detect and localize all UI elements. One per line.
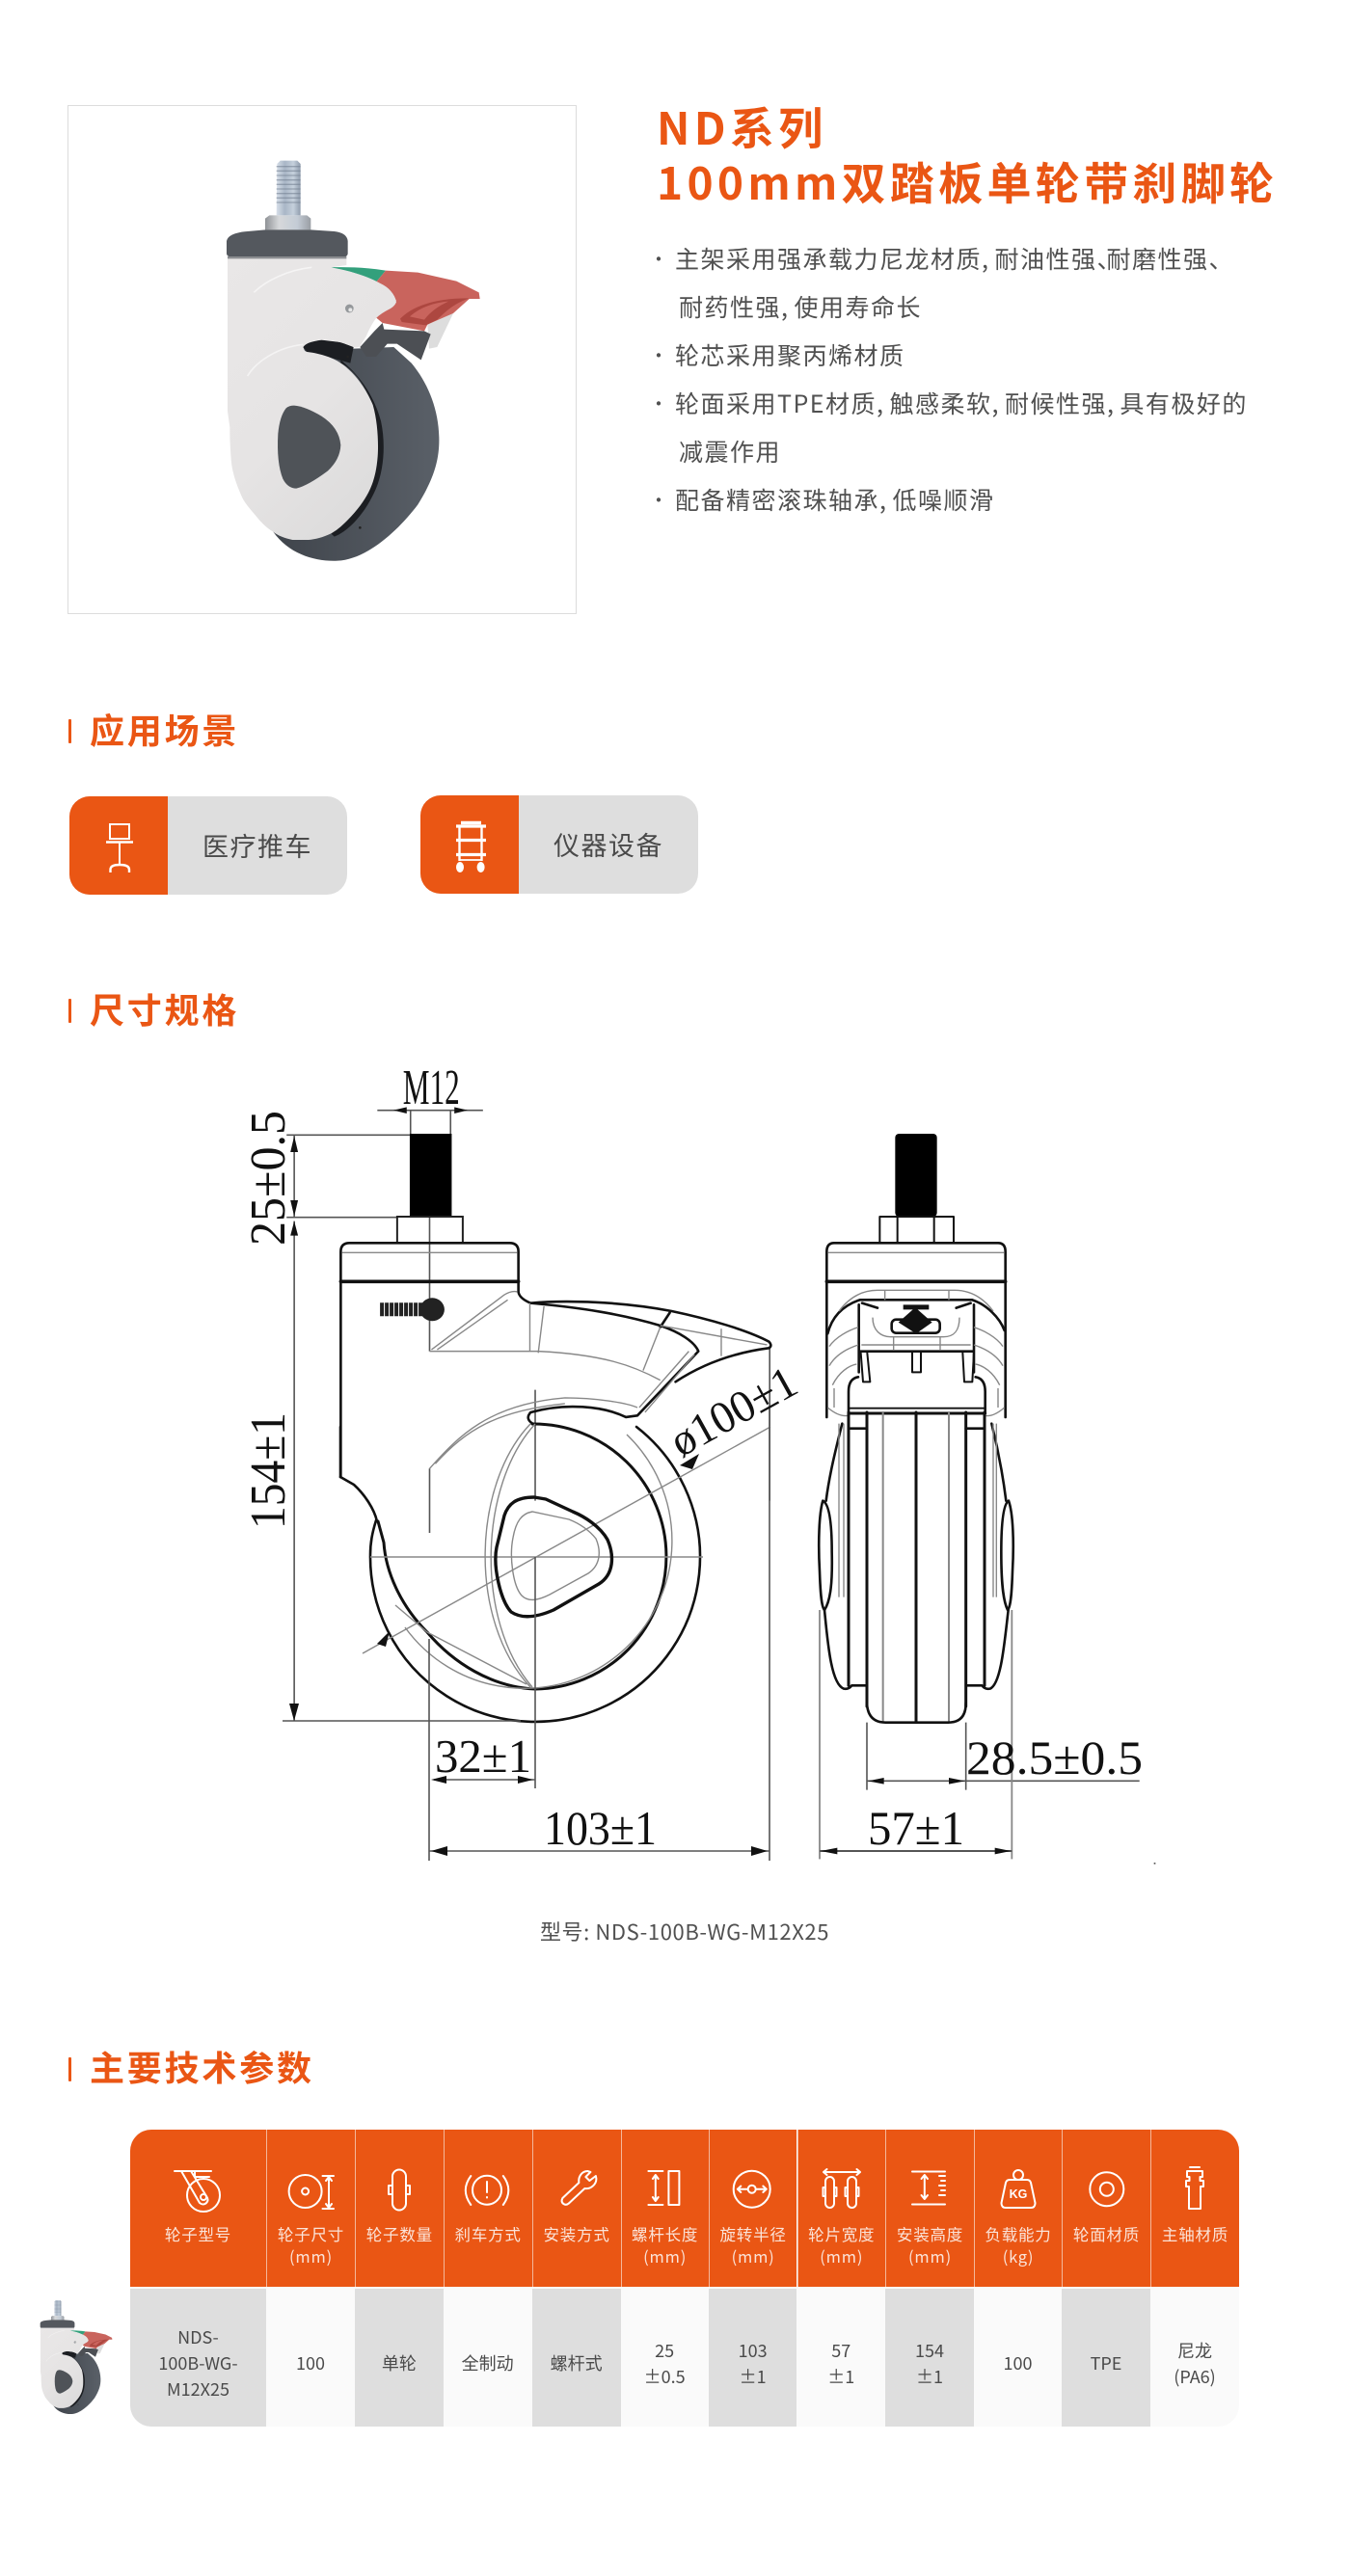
column: brake type [444,2130,532,2287]
column: wheel width: 轮片宽度 [808,2222,875,2245]
column: tread material [1062,2130,1150,2287]
column: mounting type [532,2130,621,2287]
cell: mounting height [885,2289,974,2427]
icon: caster thumbnail [40,2300,112,2414]
text block: product features: 轮芯采用聚丙烯材质 [675,337,905,372]
text block: product features: 减震作用 [679,434,781,469]
text block: product features: 主架采用强承载力尼龙材质,耐油性强、耐磨性强、 [675,241,1219,276]
cell: shaft: 尼龙 [1177,2337,1212,2362]
text block: product features: · [649,244,669,272]
text block: product features: · [649,389,669,416]
column: shaft material: 主轴材质 [1162,2222,1228,2245]
side view with dimensions: 154±1 [241,1412,296,1529]
icon: instrument trolley [456,821,486,872]
cell: swivel radius [709,2289,796,2427]
cell: model [130,2289,266,2427]
icon: caster product photo [227,160,480,561]
cell: model: 100B-WG- [158,2350,238,2375]
column: wheel model: 轮子型号 [165,2222,231,2245]
column: wheel count [355,2130,444,2287]
text block: product features: 耐药性强,使用寿命长 [679,289,922,324]
panel: product photo [68,105,577,614]
cell: swivel radius: 103 [739,2337,768,2362]
column: brake type: 刹车方式 [455,2222,522,2245]
cell: mounting height: ±1 [916,2364,943,2389]
column: load capacity: 负载能力 [985,2222,1052,2245]
panel: parameter table [130,2130,1239,2427]
panel: medical cart: 医疗推车 [202,826,312,864]
heading: application scenarios: 应用场景 [90,704,239,754]
column: mounting height: (mm) [908,2244,952,2267]
cell: shaft [1174,2337,1216,2389]
column: wheel model [130,2130,266,2287]
cell: tread: TPE [1091,2350,1121,2375]
cell: model: NDS- [177,2324,219,2349]
cell: tread [1062,2289,1150,2427]
side view with dimensions: ø100±1 [662,1356,806,1467]
side view with dimensions: 103±1 [544,1801,657,1855]
side view with dimensions [241,1060,806,1861]
cell: wheel width: 57 [831,2337,850,2362]
column: wheel size [266,2130,355,2287]
column: load capacity: KG [1009,2187,1027,2201]
front view with dimensions: 28.5±0.5 [966,1731,1143,1784]
cell: mounting [532,2289,621,2427]
heading: main technical parameters: 主要技术参数 [90,2041,314,2091]
title: ND系列 [657,94,827,158]
column: swivel radius: 旋转半径 [719,2222,787,2245]
side view with dimensions: 25±0.5 [241,1111,296,1246]
column: wheel size: (mm) [289,2244,333,2267]
column: swivel radius: (mm) [732,2244,775,2267]
column: stem length: 螺杆长度 [632,2222,698,2245]
column: wheel size: 轮子尺寸 [278,2222,344,2245]
cell: count: 单轮 [382,2350,417,2375]
chart: dimension drawing [241,1060,1155,1865]
column: mounting height [885,2130,974,2287]
title: 100mm双踏板单轮带刹脚轮 [657,149,1278,213]
cell: stem length [644,2337,686,2389]
column: mounting type: 安装方式 [543,2222,610,2245]
column: load capacity: (kg) [1003,2244,1034,2267]
column: wheel count: 轮子数量 [366,2222,433,2245]
cell: size: 100 [296,2350,325,2375]
heading: dimensions: 尺寸规格 [90,983,239,1033]
column: stem length: (mm) [643,2244,687,2267]
column: tread material: 轮面材质 [1073,2222,1140,2245]
cell: load: 100 [1003,2350,1032,2375]
icon: medical cart [106,823,133,872]
column: wheel width [796,2130,885,2287]
column: load capacity [974,2130,1062,2287]
text block: product features [649,241,1248,517]
cell: brake: 全制动 [462,2350,514,2375]
cell: stem length: ±0.5 [644,2364,686,2389]
column: wheel width: (mm) [820,2244,863,2267]
front view with dimensions: 57±1 [868,1801,964,1855]
text block: product features: 配备精密滚珠轴承,低噪顺滑 [675,482,994,517]
text block: product features: · [649,340,669,368]
column: mounting height: 安装高度 [897,2222,963,2245]
panel: medical cart [69,796,347,895]
title [657,94,1278,213]
panel: instrument equipment: 仪器设备 [554,825,663,863]
cell: wheel width: ±1 [827,2364,854,2389]
text block: product features: 轮面采用TPE材质,触感柔软,耐候性强,具有极好的 [675,386,1248,420]
column: swivel radius [709,2130,796,2287]
column: shaft material [1150,2130,1239,2287]
cell: mounting: 螺杆式 [551,2350,603,2375]
text block: product features: · [649,485,669,513]
side view with dimensions: 32±1 [435,1730,531,1783]
cell: count [355,2289,444,2427]
cell: shaft: (PA6) [1174,2364,1216,2389]
cell: stem length: 25 [655,2337,674,2362]
front view with dimensions [819,1134,1155,1865]
cell: wheel width [827,2337,854,2389]
cell: model: M12X25 [167,2376,230,2402]
cell: swivel radius: ±1 [740,2364,767,2389]
cell: mounting height: 154 [915,2337,944,2362]
column: stem length [621,2130,709,2287]
panel: instrument equipment [420,795,698,894]
text block: model number: 型号: NDS-100B-WG-M12X25 [540,1916,829,1946]
side view with dimensions: M12 [403,1060,460,1115]
